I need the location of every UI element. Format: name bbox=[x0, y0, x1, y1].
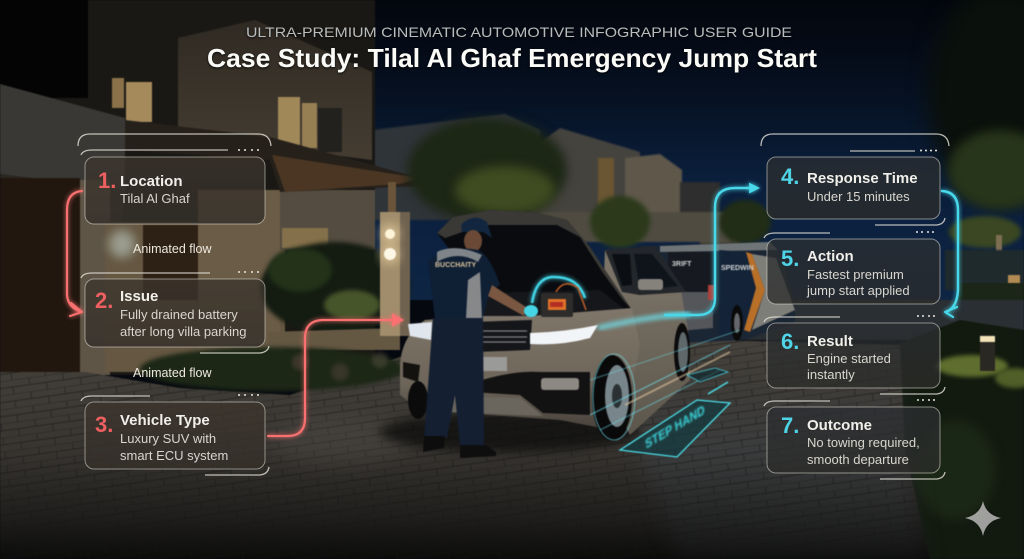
background: brick driveway bbox=[0, 340, 930, 559]
illustration: cyan light streaks bbox=[590, 314, 740, 440]
panel: action: jump start applied bbox=[806, 283, 910, 298]
icon: gate pillar with lights bbox=[380, 212, 410, 336]
background: distant villas bbox=[372, 114, 740, 245]
panel: action: Fastest premium bbox=[807, 267, 904, 282]
panel: issue: after long villa parking bbox=[120, 324, 246, 339]
panel: result: Result bbox=[807, 333, 853, 350]
panel: issue: Fully drained battery bbox=[120, 307, 238, 322]
panel: vehicle type bbox=[81, 394, 269, 475]
panel: vehicle type: smart ECU system bbox=[120, 448, 228, 463]
background: right garden bbox=[720, 0, 1024, 559]
panel: vehicle type: Vehicle Type bbox=[120, 412, 210, 429]
label: animated flow: Animated flow bbox=[133, 242, 212, 256]
illustration: technician: BUCCHAITY bbox=[435, 262, 477, 269]
panel: location: Tilal Al Ghaf bbox=[120, 191, 190, 206]
arrow: 3 to vehicle bbox=[268, 315, 402, 436]
panel: outcome: No towing required, bbox=[807, 435, 920, 450]
panel: result: 6. bbox=[781, 329, 799, 354]
panel: response time: Response Time bbox=[807, 170, 918, 187]
panel: response time: 4. bbox=[781, 164, 799, 189]
arrow: vehicle to 4 bbox=[665, 184, 758, 315]
illustration: floor projection bbox=[620, 368, 730, 457]
panel: vehicle type: Luxury SUV with bbox=[120, 431, 216, 446]
background: flower bed and walkway bbox=[140, 328, 404, 391]
panel: location bbox=[78, 134, 271, 224]
illustration: service van bbox=[640, 242, 795, 345]
background: left villa bbox=[0, 0, 420, 375]
icon: garden bollard lamp bbox=[980, 335, 995, 371]
panel: response time: Under 15 minutes bbox=[807, 189, 910, 204]
illustration: floor projection: STEP HAND bbox=[644, 402, 706, 452]
subtitle: ULTRA-PREMIUM CINEMATIC AUTOMOTIVE INFOGRAPHIC USER GUIDE bbox=[246, 24, 792, 40]
illustration: service van: SPEDWIN bbox=[721, 265, 754, 272]
panel: location: 1. bbox=[98, 168, 116, 193]
panel: result bbox=[764, 315, 945, 394]
panel: action: Action bbox=[807, 248, 854, 265]
panel: outcome: Outcome bbox=[807, 417, 872, 434]
panel: result: Engine started bbox=[807, 351, 891, 366]
panel: action bbox=[764, 231, 940, 304]
background: trees and hedges bbox=[260, 118, 771, 334]
panel: result: instantly bbox=[807, 367, 855, 382]
panel: issue bbox=[81, 271, 269, 353]
illustration: service van: 3RIFT bbox=[672, 261, 692, 268]
background: night sky bbox=[0, 0, 1024, 300]
panel: outcome: 7. bbox=[781, 413, 799, 438]
title bbox=[207, 24, 817, 73]
panel: issue: 2. bbox=[95, 288, 113, 313]
illustration: SUV with open hood bbox=[400, 210, 690, 441]
panel: outcome bbox=[764, 399, 945, 479]
panel: issue: Issue bbox=[120, 288, 158, 305]
panel: location: Location bbox=[120, 173, 182, 190]
illustration: technician bbox=[423, 218, 538, 458]
panel: action: 5. bbox=[781, 246, 799, 271]
panel: response time bbox=[761, 134, 949, 225]
panel: outcome: smooth departure bbox=[807, 452, 909, 467]
icon: sparkle watermark bbox=[965, 501, 1001, 536]
main heading: Case Study: Tilal Al Ghaf Emergency Jump Start bbox=[207, 43, 817, 73]
panel: vehicle type: 3. bbox=[95, 412, 113, 437]
arrow: 5 to 6 bbox=[942, 191, 958, 317]
icon: jump starter with cables bbox=[532, 277, 586, 317]
label: animated flow: Animated flow bbox=[133, 366, 212, 380]
arrow: 1 to 2 bbox=[67, 191, 82, 316]
